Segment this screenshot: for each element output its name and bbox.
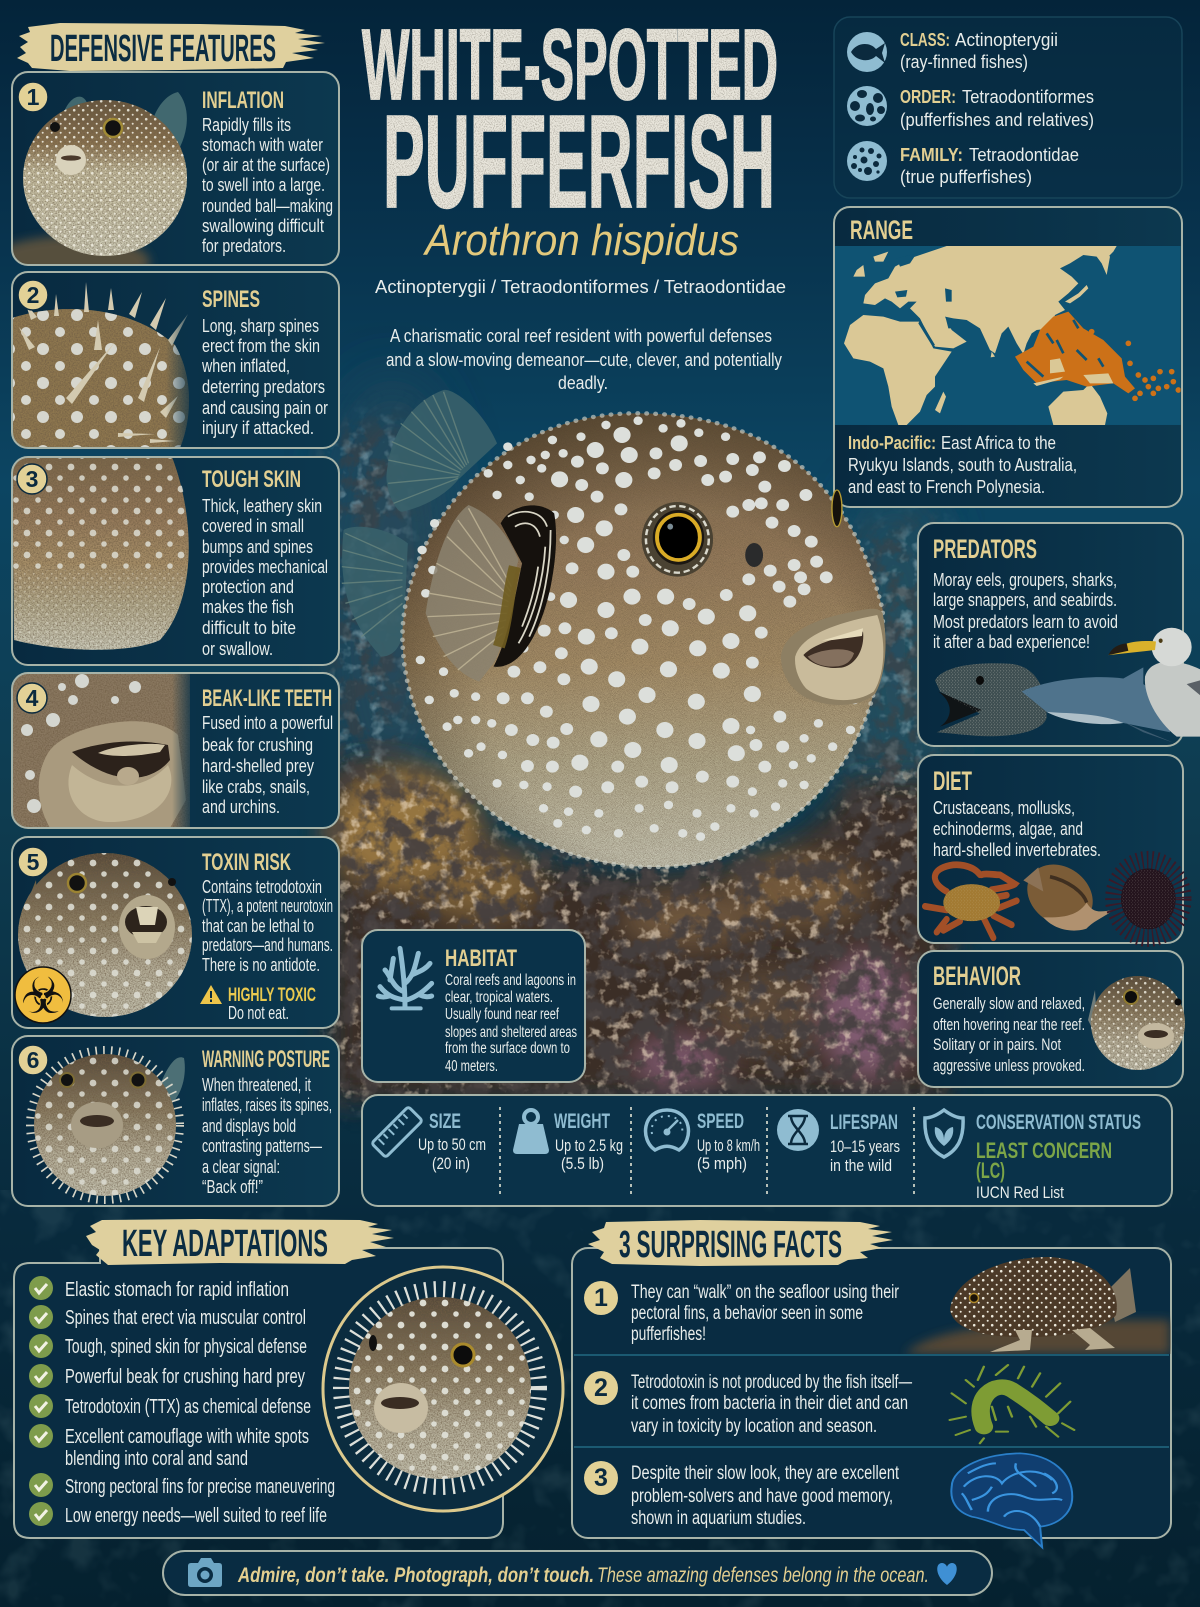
text: fact 2: Tetrodotoxin is not produced by the fish itself— [631, 1372, 912, 1393]
photo: spined skin [13, 282, 189, 447]
badge 5 [18, 847, 48, 877]
text: inflation: rounded ball—making [202, 196, 333, 216]
icon: biohazard: ☣ [21, 967, 65, 1025]
stat: lifespan [830, 1111, 900, 1175]
text: tough skin: or swallow. [202, 639, 273, 659]
text: predators [933, 570, 1118, 652]
checklist: Tetrodotoxin (TTX) as chemical defense [65, 1396, 311, 1418]
text: fact 3: Despite their slow look, they are excellent [631, 1463, 900, 1484]
icon: shield [925, 1110, 963, 1157]
stat: conservation status: (LC) [976, 1158, 1005, 1183]
heading banner: key adaptations: KEY ADAPTATIONS [122, 1223, 328, 1265]
badge 2 [18, 280, 48, 310]
far eye and nostril [745, 490, 842, 567]
callout: highly toxic: HIGHLY TOXIC [228, 985, 316, 1006]
panel: warning posture [12, 1036, 339, 1206]
text: toxin risk [202, 877, 333, 975]
panel: inflation [11, 71, 340, 266]
stat: weight: (5.5 lb) [561, 1154, 604, 1173]
icon: warning triangle [200, 985, 222, 1004]
text: diet: hard-shelled invertebrates. [933, 840, 1101, 860]
intro text: A charismatic coral reef resident with powerful defenses [390, 326, 772, 346]
icon: weight [513, 1110, 549, 1154]
stat: size: (20 in) [432, 1154, 470, 1173]
text: predators: Most predators learn to avoid [933, 612, 1118, 632]
heading: spines: SPINES [202, 286, 260, 313]
panel: habitat [362, 930, 585, 1082]
image: inflated pufferfish in circle [323, 1267, 563, 1511]
text: behavior: Solitary or in pairs. Not [933, 1035, 1061, 1054]
text: behavior: often hovering near the reef. [933, 1015, 1085, 1034]
stat: size: SIZE [429, 1110, 461, 1133]
panel: beak-like teeth [12, 673, 339, 828]
heading: habitat: HABITAT [445, 945, 517, 972]
heading banner: defensive features: DEFENSIVE FEATURES [50, 28, 276, 70]
panel: spines [12, 272, 339, 448]
text: spines: erect from the skin [202, 336, 320, 356]
stat: conservation status: LEAST CONCERN [976, 1138, 1112, 1163]
text: class: Actinopterygii [955, 30, 1058, 50]
stat: weight: WEIGHT [554, 1110, 610, 1133]
text: fact 2: it comes from bacteria in their diet and can [631, 1393, 908, 1414]
text: habitat: slopes and sheltered areas [445, 1024, 577, 1041]
badge fact 1: 1 [594, 1284, 608, 1312]
panel: predators [918, 523, 1200, 746]
border: spines [12, 272, 339, 448]
text: tough skin: difficult to bite [202, 618, 296, 638]
border: tough skin [12, 457, 339, 665]
text: class [900, 30, 1058, 72]
text: predators: large snappers, and seabirds. [933, 590, 1117, 610]
tail fin [342, 527, 408, 657]
badge fact 2: 2 [594, 1374, 608, 1402]
text: tough skin: provides mechanical [202, 557, 328, 577]
text: tough skin: Thick, leathery skin [202, 496, 322, 516]
text: beak-like teeth: like crabs, snails, [202, 777, 310, 797]
text: fact 1 [631, 1282, 900, 1345]
checklist: Spines that erect via muscular control [65, 1307, 306, 1329]
panel: toxin risk [12, 837, 339, 1028]
text: tough skin: bumps and spines [202, 537, 313, 557]
text: tough skin [202, 496, 328, 659]
text: inflation: to swell into a large. [202, 175, 325, 195]
text: spines: and causing pain or [202, 398, 328, 418]
stat: conservation status [976, 1111, 1141, 1202]
text: warning posture: “Back off!” [202, 1177, 263, 1197]
stat: speed [697, 1110, 760, 1173]
text: habitat: 40 meters. [445, 1058, 498, 1075]
text: family [900, 145, 1079, 187]
stat: weight: Up to 2.5 kg [555, 1136, 623, 1155]
text: range description: Indo-Pacific: [848, 433, 936, 453]
body [402, 413, 883, 867]
image: bacterium [950, 1365, 1074, 1443]
checklist: Elastic stomach for rapid inflation [65, 1279, 289, 1301]
panel: key adaptations [14, 1219, 563, 1538]
panel: stats bar [362, 1095, 1172, 1206]
text: conservation message: Admire, don’t take. Photograph, don’t touch. [237, 1564, 594, 1587]
mouth [781, 609, 886, 705]
icon: fish [847, 32, 887, 72]
badge 4 [17, 683, 47, 713]
text: order [900, 87, 1094, 130]
text: warning posture: a clear signal: [202, 1157, 280, 1177]
text: habitat: clear, tropical waters. [445, 989, 553, 1006]
checklist: Excellent camouflage with white spots [65, 1426, 309, 1448]
text: habitat: from the surface down to [445, 1040, 570, 1057]
checklist: Powerful beak for crushing hard prey [65, 1366, 305, 1388]
text: fact 2 [631, 1372, 912, 1437]
image: crab, snail and urchin [925, 853, 1179, 938]
image: moray eel, shark and seagull [935, 628, 1200, 743]
stat: speed: SPEED [697, 1110, 744, 1133]
text: diet: Crustaceans, mollusks, [933, 798, 1075, 818]
checklist: Strong pectoral fins for precise maneuvering [65, 1476, 335, 1498]
badge fact 3: 3 [594, 1464, 608, 1492]
stat: conservation status: IUCN Red List [976, 1183, 1064, 1202]
badge 6 [18, 1045, 48, 1075]
icon: ruler [372, 1107, 422, 1157]
text: spines: injury if attacked. [202, 418, 314, 438]
badge 1: 1 [27, 84, 40, 110]
text: spines: Long, sharp spines [202, 316, 319, 336]
heading banner: 3 surprising facts [588, 1220, 893, 1266]
heading: behavior: BEHAVIOR [933, 961, 1021, 991]
text: diet: echinoderms, algae, and [933, 819, 1083, 839]
heading: predators: PREDATORS [933, 534, 1037, 564]
text: toxin risk: that can be lethal to [202, 916, 314, 936]
panel: range [834, 207, 1182, 507]
stat: weight [554, 1110, 623, 1173]
text: beak-like teeth: Fused into a powerful [202, 713, 333, 733]
heading: warning posture: WARNING POSTURE [202, 1046, 330, 1073]
checklist: Low energy needs—well suited to reef life [65, 1505, 327, 1527]
dorsal fin [386, 390, 497, 512]
badge 3 [17, 464, 47, 494]
badge fact 3 [584, 1461, 618, 1495]
badge fact 2 [584, 1371, 618, 1405]
panel: behavior [918, 951, 1185, 1087]
photo: inflated pufferfish [13, 92, 187, 264]
badge 3: 3 [26, 466, 38, 492]
text: range description: and east to French Polynesia. [848, 477, 1045, 497]
text: family: FAMILY: [900, 145, 963, 165]
text: toxin risk: predators—and humans. [202, 935, 333, 955]
intro text [386, 326, 782, 393]
gill opening [494, 505, 556, 667]
photo: pufferfish showing teeth [18, 853, 192, 1017]
badge fact 1 [584, 1281, 618, 1315]
photo: skin texture [12, 457, 189, 650]
text: inflation: for predators. [202, 236, 286, 256]
stat: lifespan: in the wild [830, 1156, 892, 1175]
map: indo-pacific range [835, 246, 1181, 425]
text: order: (pufferfishes and relatives) [900, 110, 1094, 130]
text: range description [848, 433, 1077, 497]
title: WHITE-SPOTTED [362, 9, 778, 121]
stat: lifespan: LIFESPAN [830, 1111, 898, 1134]
text: tough skin: covered in small [202, 516, 304, 536]
text: conservation message [237, 1564, 929, 1587]
intro text: deadly. [558, 373, 608, 393]
text: predators: Moray eels, groupers, sharks, [933, 570, 1117, 590]
skin bumps [402, 413, 883, 867]
text: behavior: aggressive unless provoked. [933, 1056, 1085, 1075]
text: class: (ray-finned fishes) [900, 52, 1028, 72]
photo: beak close-up [12, 673, 196, 828]
text: toxin risk: Contains tetrodotoxin [202, 877, 322, 897]
heading: diet: DIET [933, 766, 972, 796]
text: conservation message: These amazing defenses belong in the ocean. [597, 1564, 929, 1587]
title [362, 9, 778, 235]
icon: heart [937, 1563, 957, 1585]
icon: speedometer [646, 1110, 688, 1150]
text: family: Tetraodontidae [969, 145, 1079, 165]
checklist: blending into coral and sand [65, 1448, 248, 1470]
text: habitat [445, 972, 577, 1075]
icon: camera [188, 1558, 222, 1587]
pectoral fin [426, 505, 518, 682]
border: range panel [834, 207, 1182, 507]
subtitle: scientific name: Arothron hispidus [422, 216, 739, 265]
icon: hourglass [777, 1109, 819, 1151]
badge 4: 4 [26, 685, 39, 711]
heading: toxin risk: TOXIN RISK [202, 849, 291, 876]
badge 2: 2 [27, 282, 39, 308]
text: warning posture: inflates, raises its spines, [202, 1095, 332, 1115]
intro text: and a slow-moving demeanor—cute, clever, and potentially [386, 350, 782, 370]
text: spines: deterring predators [202, 377, 325, 397]
text: predators: it after a bad experience! [933, 632, 1090, 652]
text: inflation: stomach with water [202, 135, 323, 155]
text: range description: East Africa to the [941, 433, 1056, 453]
text: beak-like teeth: hard-shelled prey [202, 756, 314, 776]
photo: spined pufferfish front view [32, 1052, 185, 1198]
text: spines [201, 316, 328, 438]
text: behavior: Generally slow and relaxed, [933, 994, 1085, 1013]
text: fact 3: shown in aquarium studies. [631, 1508, 806, 1529]
main illustration: white-spotted pufferfish [342, 390, 886, 867]
footer callout [163, 1551, 992, 1595]
eye [642, 502, 713, 577]
panel: surprising facts [572, 1220, 1171, 1547]
text: warning posture: contrasting patterns— [202, 1136, 322, 1156]
checklist [29, 1276, 335, 1527]
heading banner: defensive features [17, 23, 325, 71]
text: family: (true pufferfishes) [900, 167, 1032, 187]
panel: classification [834, 17, 1182, 198]
callout: highly toxic: Do not eat. [228, 1003, 289, 1023]
text: behavior [933, 994, 1085, 1075]
image: pufferfish [1088, 976, 1185, 1070]
text: beak-like teeth: and urchins. [202, 797, 280, 817]
text: order: Tetraodontiformes [962, 87, 1094, 107]
text: spines: when inflated, [201, 356, 290, 376]
stat: speed: Up to 8 km/h [697, 1136, 760, 1155]
text: fact 3 [631, 1463, 900, 1529]
text: fact 1: pectoral fins, a behavior seen in some [631, 1303, 863, 1324]
text: fact 3: problem-solvers and have good memory, [631, 1486, 893, 1507]
text: fact 1: pufferfishes! [631, 1324, 706, 1345]
text: toxin risk: There is no antidote. [202, 955, 320, 975]
icon: order [847, 86, 887, 126]
image: walking pufferfish on seafloor [905, 1257, 1170, 1354]
text: warning posture [202, 1075, 332, 1197]
text: habitat: Coral reefs and lagoons in [445, 972, 576, 989]
text: diet [933, 798, 1101, 860]
text: warning posture: When threatened, it [202, 1075, 311, 1095]
image: brain [951, 1453, 1072, 1547]
border: inflation [12, 72, 339, 265]
checklist: Tough, spined skin for physical defense [65, 1336, 307, 1358]
text: fact 1: They can “walk” on the seafloor using their [631, 1282, 900, 1303]
taxonomy line: Actinopterygii / Tetraodontiformes / Tetraodontidae [375, 277, 786, 297]
panel: tough skin [12, 457, 339, 665]
border: beak-like teeth [12, 673, 339, 828]
white spots [420, 421, 854, 837]
panel: diet [918, 755, 1183, 943]
badge 6: 6 [27, 1047, 39, 1073]
stat: lifespan: 10–15 years [830, 1137, 900, 1156]
heading: inflation: INFLATION [202, 87, 284, 114]
heading: range: RANGE [850, 215, 913, 245]
text: class: CLASS: [900, 30, 950, 50]
text: beak-like teeth: beak for crushing [202, 735, 313, 755]
heading banner: key adaptations [86, 1219, 394, 1265]
stat: size [418, 1110, 486, 1173]
text: inflation: Rapidly fills its [202, 115, 291, 135]
badge 1 [18, 82, 48, 112]
text: habitat: Usually found near reef [445, 1006, 559, 1023]
icon: coral [378, 948, 432, 1008]
text: tough skin: makes the fish [202, 597, 294, 617]
badge 5: 5 [27, 849, 40, 875]
text: inflation: swallowing difficult [202, 216, 324, 236]
text: beak-like teeth [202, 713, 333, 817]
body shading [402, 413, 883, 867]
stat: speed: (5 mph) [697, 1154, 747, 1173]
icon: family [847, 141, 887, 181]
text: warning posture: and displays bold [202, 1116, 296, 1136]
text: fact 2: vary in toxicity by location and season. [631, 1416, 877, 1437]
heading: tough skin: TOUGH SKIN [202, 466, 301, 493]
stat: size: Up to 50 cm [418, 1135, 486, 1154]
text: tough skin: protection and [202, 577, 294, 597]
text: range description: Ryukyu Islands, south to Australia, [848, 455, 1077, 475]
callout: highly toxic [228, 985, 316, 1023]
text: inflation [202, 115, 333, 256]
text: toxin risk: (TTX), a potent neurotoxin [202, 896, 333, 916]
heading banner: 3 surprising facts: 3 SURPRISING FACTS [619, 1224, 842, 1266]
heading: beak-like teeth: BEAK-LIKE TEETH [202, 685, 332, 712]
text: PUFFERFISH [383, 88, 775, 235]
text: inflation: (or air at the surface) [202, 155, 330, 175]
text: order: ORDER: [900, 87, 956, 107]
